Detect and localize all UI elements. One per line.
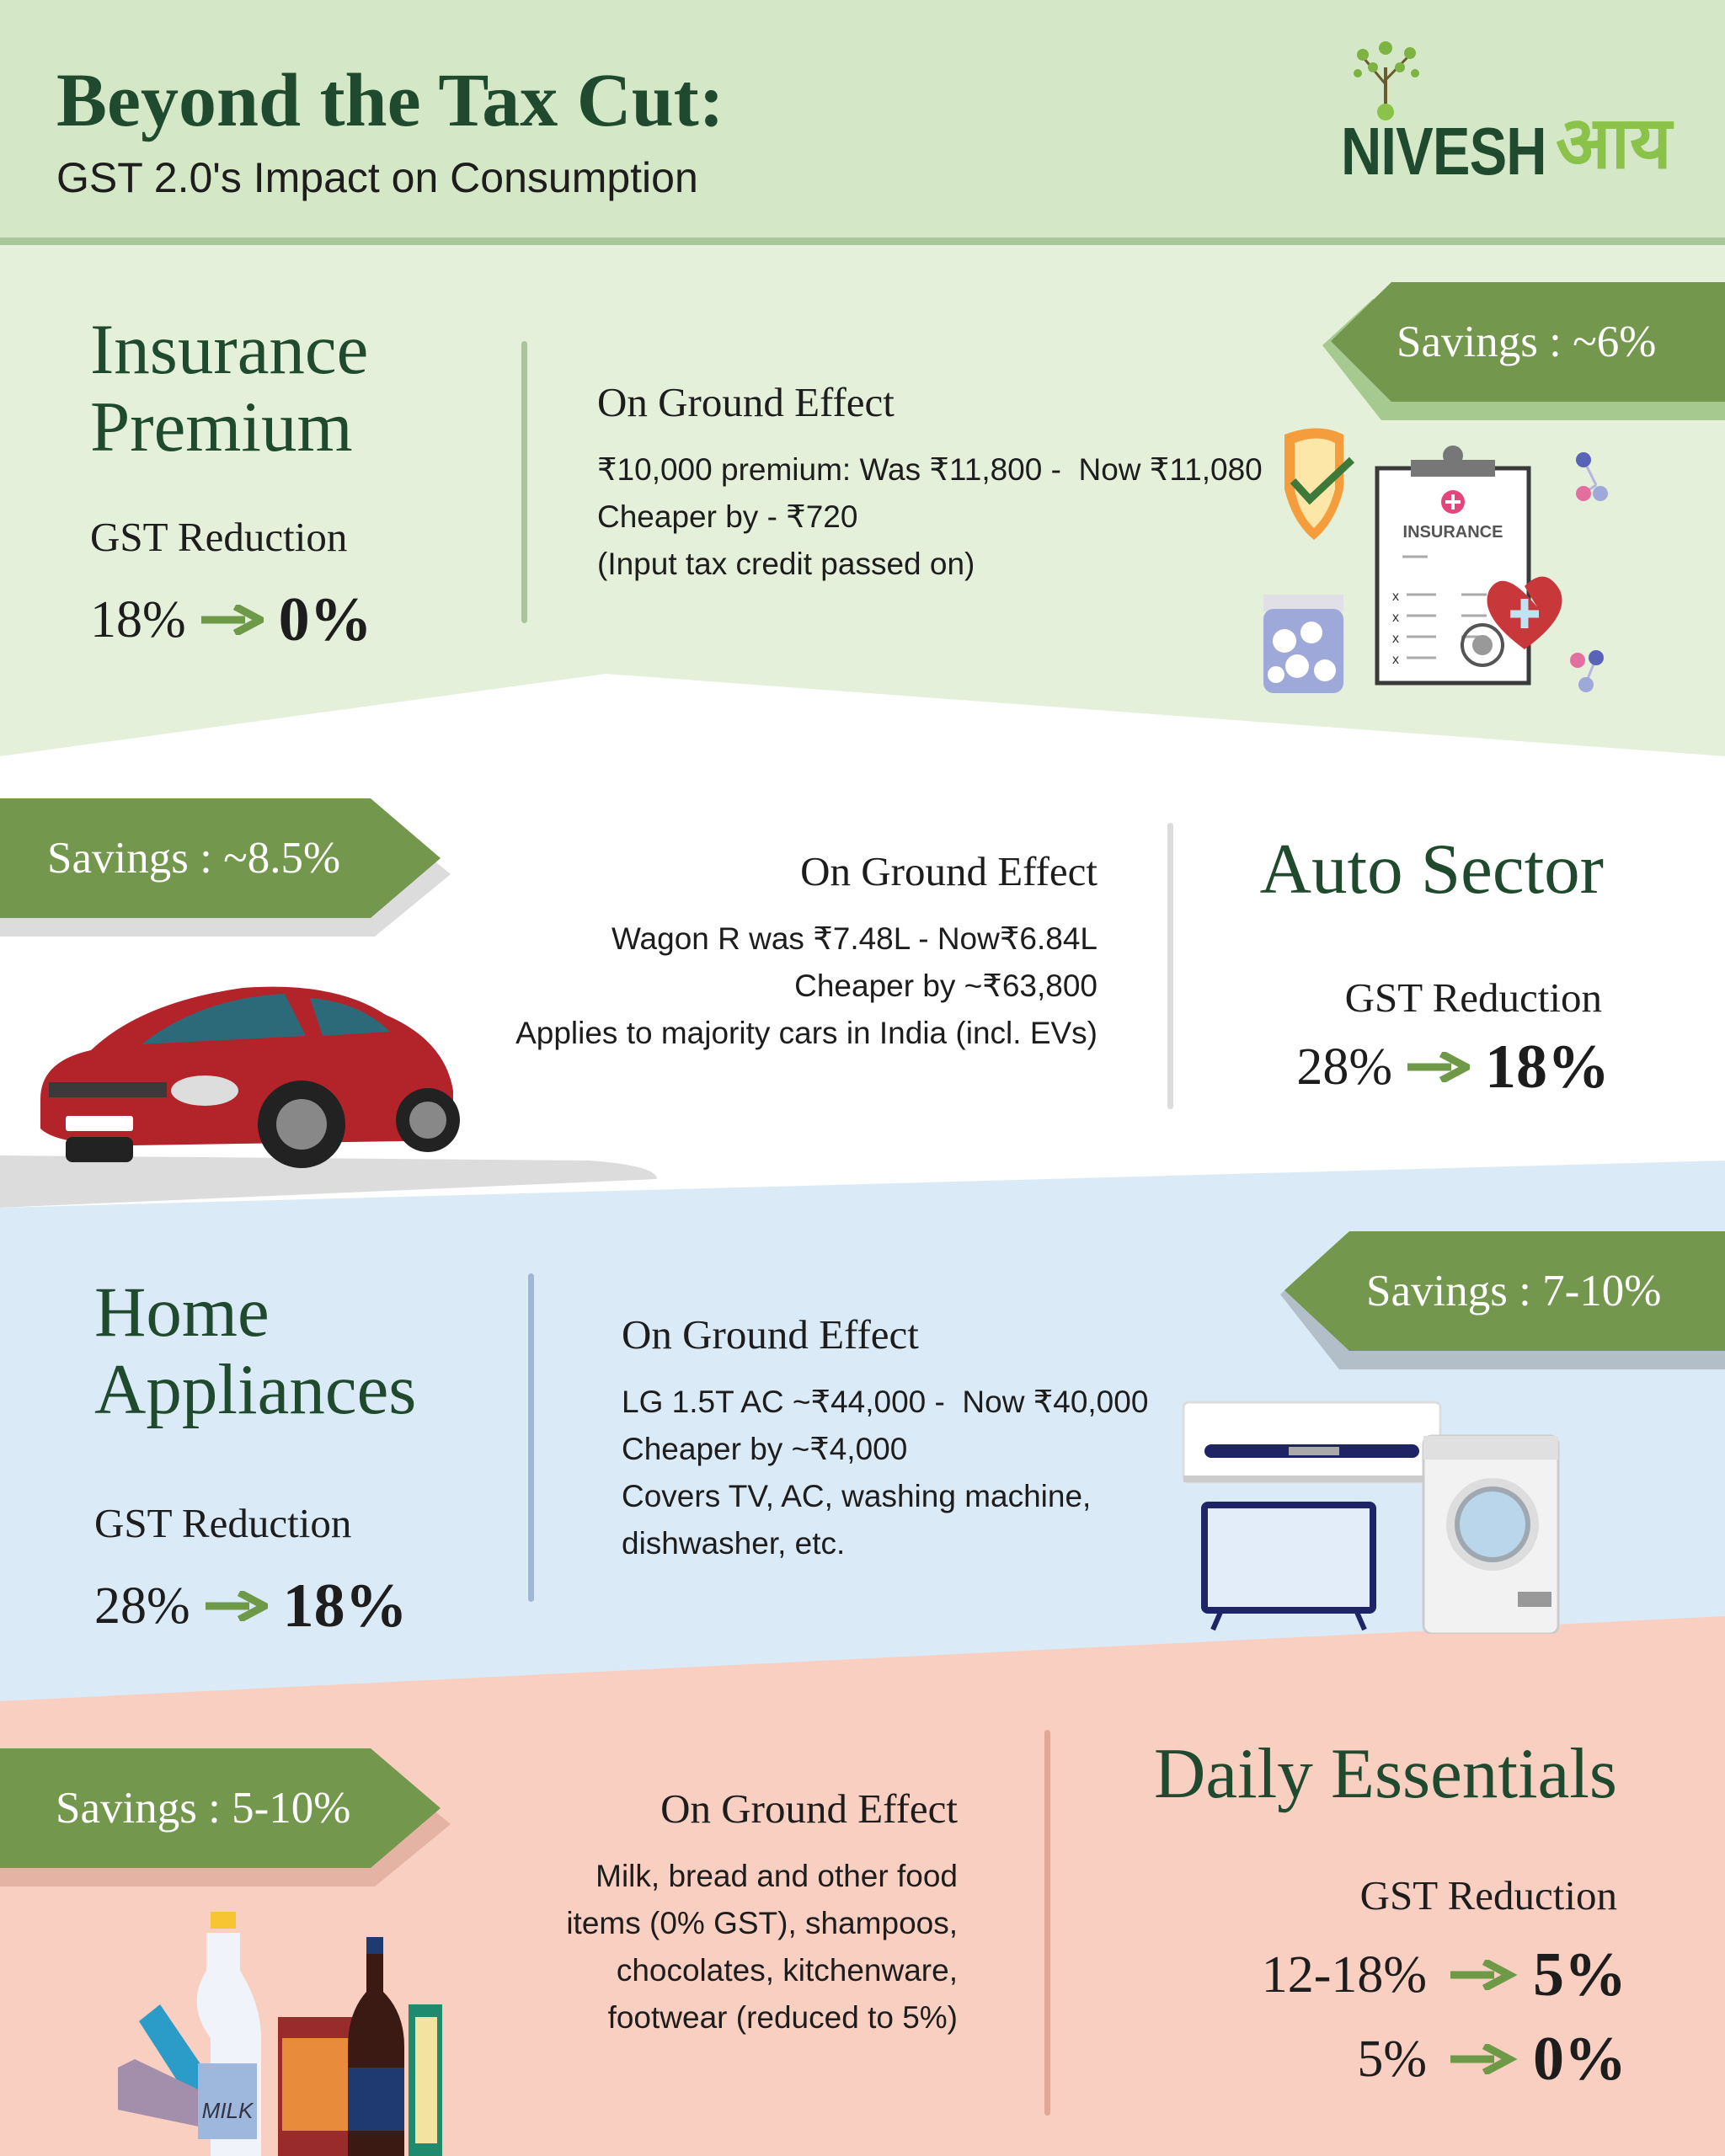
rate change 1: 5%	[1533, 1940, 1626, 2009]
rate change: 18%	[283, 1572, 408, 1641]
on ground effect: On Ground Effect	[800, 848, 1097, 894]
divider	[528, 1273, 534, 1602]
rate change 2: 0%	[1533, 2025, 1626, 2094]
on ground effect: Applies to majority cars in India (incl. EVs)	[515, 1016, 1097, 1050]
on ground effect: Cheaper by ~₹63,800	[794, 969, 1097, 1003]
icon: groceries	[118, 1912, 442, 2156]
on ground effect: LG 1.5T AC ~₹44,000 - Now ₹40,000	[622, 1385, 1148, 1419]
on ground effect: Milk, bread and other food	[595, 1859, 958, 1893]
rate change 1	[1262, 1940, 1626, 2009]
heading: Home Appliances	[94, 1273, 416, 1429]
rate change: 0%	[279, 585, 372, 654]
on ground effect: On Ground Effect	[660, 1785, 958, 1832]
GST reduction label: GST Reduction	[1360, 1872, 1617, 1919]
on ground effect: footwear (reduced to 5%)	[608, 2000, 958, 2035]
icon: insurance illustration	[1263, 428, 1608, 693]
savings banner	[1280, 1231, 1725, 1369]
logo: आय	[1556, 103, 1672, 184]
on ground effect: items (0% GST), shampoos,	[566, 1906, 958, 1940]
icon: groceries: MILK	[202, 2098, 254, 2123]
icon: tree	[1354, 41, 1419, 120]
rate change: 18%	[1485, 1033, 1610, 1102]
heading: Insurance Premium: Premium	[90, 387, 353, 467]
heading: Auto Sector: Auto Sector	[1260, 830, 1604, 909]
icon: appliances	[1183, 1401, 1560, 1634]
savings banner: Savings : 5-10%	[56, 1784, 350, 1833]
on ground effect	[515, 848, 1097, 1050]
rate change 2: 5%	[1357, 2031, 1427, 2088]
icon: insurance illustration: x	[1392, 611, 1399, 625]
savings banner: Savings : 7-10%	[1366, 1267, 1661, 1315]
GST reduction label: GST Reduction	[90, 514, 347, 560]
rate change: 28%	[94, 1577, 190, 1635]
rate change 2	[1357, 2025, 1626, 2094]
on ground effect	[597, 379, 1263, 581]
divider	[1044, 1730, 1050, 2116]
logo	[1341, 41, 1674, 189]
heading: Home Appliances: Appliances	[94, 1350, 416, 1429]
panel: auto sector	[0, 798, 1610, 1168]
icon: insurance illustration: INSURANCE	[1403, 523, 1503, 542]
savings banner: Savings : ~8.5%	[47, 834, 340, 883]
title: Beyond the Tax Cut:	[56, 59, 724, 142]
on ground effect: Covers TV, AC, washing machine,	[622, 1479, 1091, 1513]
rate change	[94, 1572, 408, 1641]
on ground effect: Cheaper by - ₹720	[597, 499, 857, 534]
on ground effect: ₹10,000 premium: Was ₹11,800 - Now ₹11,080	[597, 452, 1263, 487]
rate change	[1296, 1033, 1610, 1102]
on ground effect: On Ground Effect	[597, 379, 895, 425]
GST reduction label: GST Reduction	[94, 1500, 351, 1546]
savings banner: Savings : ~6%	[1397, 318, 1656, 366]
heading: Daily Essentials: Daily Essentials	[1154, 1734, 1617, 1813]
on ground effect: chocolates, kitchenware,	[617, 1953, 958, 1988]
on ground effect: On Ground Effect	[622, 1311, 919, 1358]
panel: insurance	[90, 282, 1725, 693]
savings banner	[1322, 282, 1725, 420]
icon: insurance illustration: x	[1392, 653, 1399, 667]
icon: insurance illustration: x	[1392, 632, 1399, 646]
rate change	[90, 585, 372, 654]
subtitle: GST 2.0's Impact on Consumption	[56, 154, 698, 201]
icon: insurance illustration: x	[1392, 590, 1399, 604]
GST reduction label: GST Reduction	[1345, 974, 1602, 1021]
panel: daily essentials	[0, 1730, 1626, 2156]
panel: home appliances	[94, 1231, 1725, 1641]
heading: Home Appliances: Home	[94, 1273, 270, 1352]
on ground effect	[566, 1785, 958, 2035]
icon: red car	[40, 987, 460, 1168]
heading: Insurance Premium: Insurance	[90, 310, 368, 389]
on ground effect: dishwasher, etc.	[622, 1526, 845, 1561]
on ground effect: Cheaper by ~₹4,000	[622, 1432, 907, 1466]
on ground effect	[622, 1311, 1148, 1561]
rate change: 28%	[1296, 1038, 1392, 1096]
savings banner	[0, 1748, 451, 1886]
logo: NIVESH	[1341, 115, 1546, 189]
rate change 1: 12-18%	[1262, 1946, 1427, 2004]
on ground effect: (Input tax credit passed on)	[597, 547, 975, 581]
heading: Insurance Premium	[90, 310, 368, 467]
divider	[521, 341, 527, 623]
on ground effect: Wagon R was ₹7.48L - Now₹6.84L	[611, 921, 1097, 956]
savings banner	[0, 798, 451, 937]
rate change: 18%	[90, 591, 186, 648]
divider	[1167, 823, 1173, 1109]
